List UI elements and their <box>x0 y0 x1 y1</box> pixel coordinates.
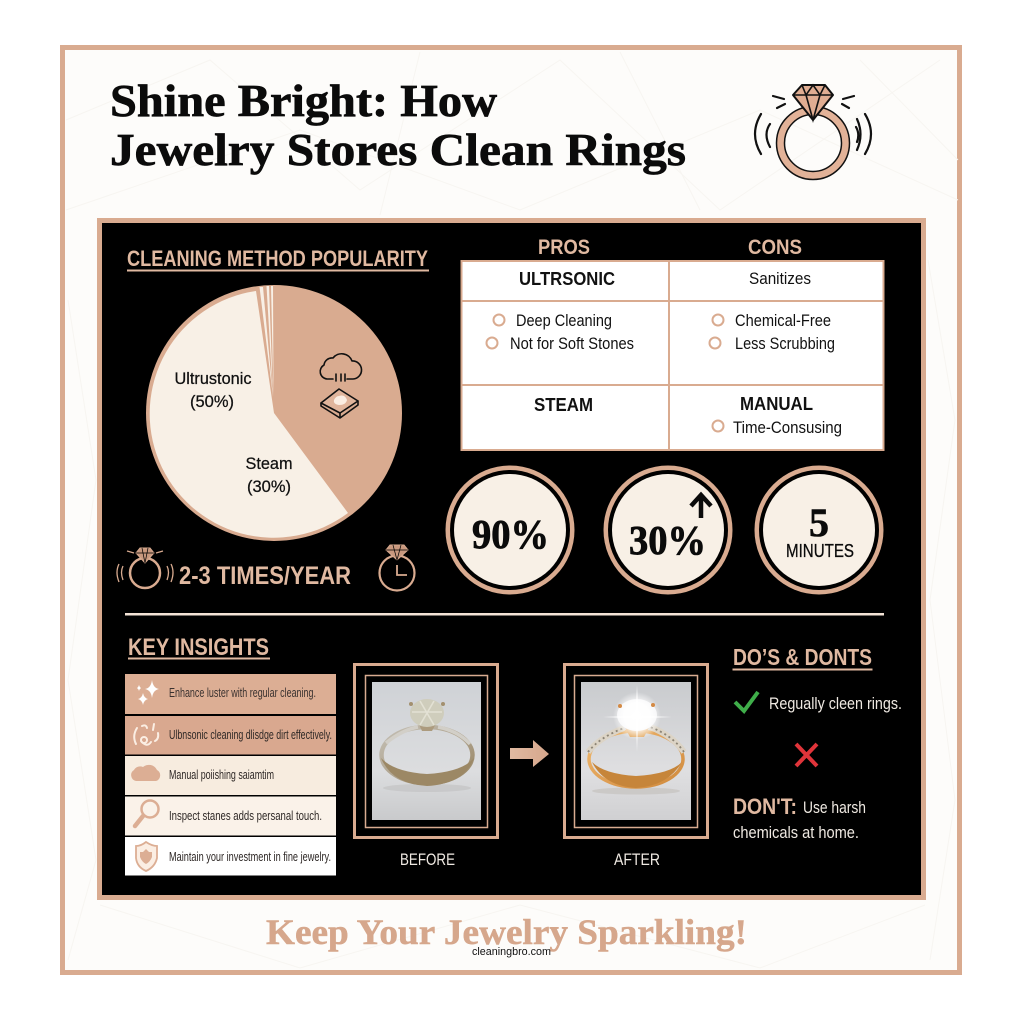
table: pros and cons <box>461 236 884 450</box>
insight row: enhance luster: Enhance luster with regular cleaning. <box>169 686 316 700</box>
table: pros and cons: CONS <box>748 236 802 259</box>
heading: cleaning method popularity: CLEANING METHOD POPULARITY <box>127 246 428 271</box>
label: before: BEFORE <box>400 851 455 869</box>
icon: green check <box>735 692 758 711</box>
pie chart: cleaning method popularity: (50%) <box>190 393 234 411</box>
table: pros and cons: Chemical-Free <box>735 312 831 330</box>
image: tarnished ring <box>381 699 474 792</box>
do item: regularly clean rings <box>735 692 902 713</box>
label: after: AFTER <box>614 851 660 869</box>
footer url: cleaningbro.com <box>472 946 551 958</box>
stat circle: 90%: 90% <box>472 511 549 557</box>
insight row: maintain investment <box>125 837 336 876</box>
heading: key insights: KEY INSIGHTS <box>128 634 269 661</box>
icon: ring with clock <box>380 545 414 590</box>
list: key insights <box>125 674 336 876</box>
heading: dos and donts: DO’S & DONTS <box>733 644 872 670</box>
dont item: harsh chemicals: Use harsh <box>803 798 866 817</box>
icon: up arrow <box>691 495 711 518</box>
arrow: before to after <box>510 740 549 767</box>
do item: regularly clean rings: Regually cleen rings. <box>769 694 902 713</box>
pie chart: cleaning method popularity <box>146 285 402 541</box>
insight row: inspect stones <box>125 796 336 836</box>
pie chart: cleaning method popularity: Steam <box>246 455 292 473</box>
footer tagline: Keep Your Jewelry Sparkling! <box>266 912 747 952</box>
table: pros and cons: Sanitizes <box>749 270 811 288</box>
table: pros and cons: Deep Cleaning <box>516 312 612 330</box>
insight row: inspect stones: Inspect stanes adds persanal touch. <box>169 809 322 823</box>
stat circle: 90% <box>446 466 574 594</box>
stat circle: 5 minutes <box>754 466 884 594</box>
pie chart: cleaning method popularity: Ultrustonic <box>174 370 252 388</box>
dont item: harsh chemicals: DON'T: <box>733 794 797 819</box>
insight row: ultrasonic cleaning: Ulbnsonic cleaning dlisdge dirt effectively. <box>169 728 332 742</box>
before photo frame <box>354 664 498 838</box>
title: Shine Bright: How <box>110 75 497 126</box>
icon: red cross <box>796 744 817 766</box>
icon: diamond ring with vibration <box>755 85 871 176</box>
image: sparkling clean ring <box>588 685 684 794</box>
icon: ring with vibration small <box>117 548 173 588</box>
title: Jewelry Stores Clean Rings <box>110 124 686 175</box>
table: pros and cons: MANUAL <box>740 394 813 414</box>
insight row: enhance luster <box>125 674 336 714</box>
pie chart: cleaning method popularity: (30%) <box>247 478 291 496</box>
stat circle: 30% up: 30% <box>629 517 706 563</box>
stat: 2-3 times per year <box>117 545 414 590</box>
icon: steam cloud and plate <box>320 354 362 418</box>
dont item: harsh chemicals <box>733 794 866 842</box>
stat circle: 5 minutes: 5 <box>809 500 829 545</box>
table: pros and cons: PROS <box>538 236 590 259</box>
table: pros and cons: STEAM <box>534 395 593 415</box>
table: pros and cons: Less Scrubbing <box>735 335 835 353</box>
insight row: maintain investment: Maintain your investment in fine jewelry. <box>169 850 331 864</box>
panel: main black panel <box>100 220 924 898</box>
stat circle: 5 minutes: MINUTES <box>786 541 854 561</box>
stat: 2-3 times per year: 2-3 TIMES/YEAR <box>179 562 351 590</box>
table: pros and cons: Time-Consusing <box>733 419 842 437</box>
after photo frame <box>564 664 708 838</box>
insight row: manual polishing: Manual poiishing saiamtim <box>169 768 274 782</box>
insight row: ultrasonic cleaning <box>125 716 336 754</box>
stat circle: 30% up <box>604 466 732 594</box>
insight row: manual polishing <box>125 756 336 795</box>
title <box>110 75 686 175</box>
table: pros and cons: ULTRSONIC <box>519 269 615 289</box>
dont item: harsh chemicals: chemicals at home. <box>733 823 859 842</box>
table: pros and cons: Not for Soft Stones <box>510 335 634 353</box>
